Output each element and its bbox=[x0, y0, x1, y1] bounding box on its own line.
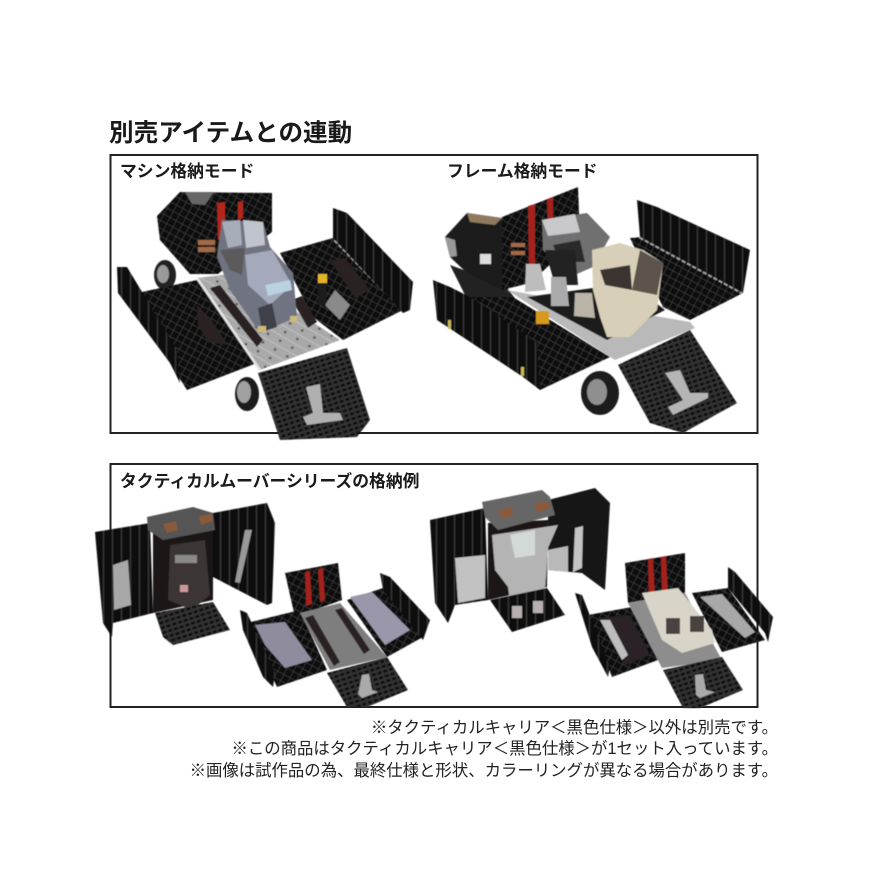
photo: carrier in machine storage mode bbox=[117, 192, 413, 440]
label: machine storage mode: マシン格納モード bbox=[120, 162, 254, 181]
panel: machine and frame storage modes bbox=[110, 155, 758, 433]
photo: tactical mover in black carrier, left robot case bbox=[95, 503, 275, 645]
notes bbox=[190, 719, 778, 780]
photo: tactical mover in black carrier, right robot case bbox=[430, 488, 610, 632]
label: tactical mover series: タクティカルムーバーシリーズの格納例 bbox=[120, 471, 419, 491]
photo: tactical mover parts in black carrier, right bbox=[575, 553, 773, 708]
label: frame storage mode: フレーム格納モード bbox=[447, 162, 598, 181]
photo: carrier in frame storage mode bbox=[433, 187, 750, 433]
title: 別売アイテムとの連動 bbox=[109, 119, 352, 147]
note line 2: ※この商品はタクティカルキャリア＜黒色仕様＞が1セット入っています。 bbox=[231, 740, 778, 758]
panel: tactical mover storage examples bbox=[110, 464, 758, 707]
note line 3: ※画像は試作品の為、最終仕様と形状、カラーリングが異なる場合があります。 bbox=[190, 762, 778, 780]
note line 1: ※タクティカルキャリア＜黒色仕様＞以外は別売です。 bbox=[371, 719, 778, 737]
photo: tactical mover parts in black carrier, left bbox=[240, 563, 430, 707]
